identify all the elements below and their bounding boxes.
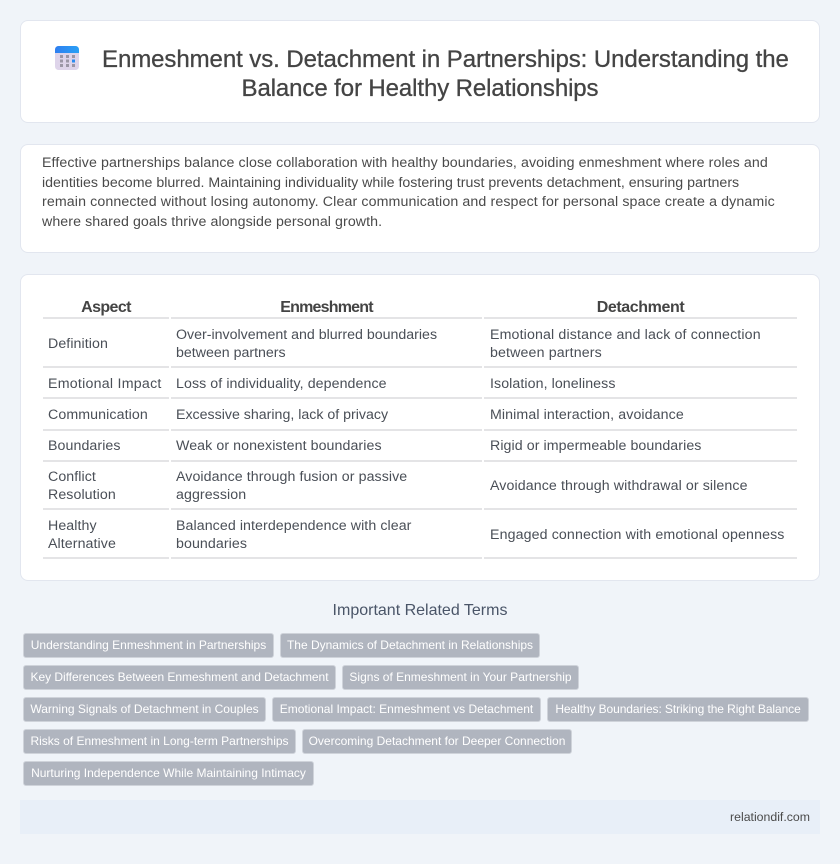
row: conflict resolution	[48, 469, 116, 503]
healthy alternative: detachment: Engaged connection with emotional openness	[490, 527, 785, 543]
row: healthy alternative: Alternative	[48, 536, 116, 552]
tag	[272, 697, 541, 722]
definition: enmeshment	[176, 327, 437, 361]
icon: calendar	[55, 46, 79, 70]
row: emotional impact: Emotional Impact	[48, 376, 162, 392]
footer	[20, 800, 820, 834]
row: conflict resolution: Conflict	[48, 469, 96, 485]
conflict resolution: detachment: Avoidance through withdrawal or silence	[490, 478, 748, 494]
tag: Understanding Enmeshment in Partnerships	[31, 638, 266, 652]
panel: header	[20, 20, 820, 123]
tag	[280, 633, 540, 658]
tag: Nurturing Independence While Maintaining Intimacy	[31, 766, 306, 780]
tag	[23, 761, 314, 786]
table header: enmeshment: Enmeshment	[280, 299, 373, 316]
footer text: relationdif.com	[730, 810, 810, 824]
emotional impact: enmeshment: Loss of individuality, dependence	[176, 376, 387, 392]
tags: related terms	[23, 633, 809, 786]
title	[102, 46, 789, 102]
tag: Healthy Boundaries: Striking the Right Balance	[555, 702, 801, 716]
tag: The Dynamics of Detachment in Relationships	[287, 638, 533, 652]
tag: Risks of Enmeshment in Long-term Partnerships	[30, 734, 289, 748]
text block: introduction: Effective partnerships balance close collaboration with healthy boundaries, avoiding enmeshment where roles and	[42, 155, 768, 171]
heading: important related terms: Important Related Terms	[333, 602, 507, 619]
tag: Key Differences Between Enmeshment and Detachment	[30, 670, 328, 684]
healthy alternative: enmeshment: Balanced interdependence with clear	[176, 518, 411, 534]
tag: Warning Signals of Detachment in Couples	[30, 702, 259, 716]
conflict resolution: enmeshment: Avoidance through fusion or passive	[176, 469, 407, 485]
tag: Overcoming Detachment for Deeper Connection	[309, 734, 565, 748]
healthy alternative: enmeshment: boundaries	[176, 536, 247, 552]
definition: detachment	[490, 327, 761, 361]
communication: detachment: Minimal interaction, avoidance	[490, 407, 684, 423]
title line 2: Balance for Healthy Relationships	[242, 75, 598, 102]
tag: Emotional Impact: Enmeshment vs Detachment	[280, 702, 533, 716]
boundaries: enmeshment: Weak or nonexistent boundaries	[176, 438, 382, 454]
table header: aspect: Aspect	[81, 299, 131, 316]
row: definition: Definition	[48, 336, 108, 352]
row: healthy alternative: Healthy	[48, 518, 97, 534]
conflict resolution: enmeshment	[176, 469, 407, 503]
definition: enmeshment: Over-involvement and blurred boundaries	[176, 327, 437, 343]
communication: enmeshment: Excessive sharing, lack of privacy	[176, 407, 388, 423]
text block: introduction: remain connected without losing autonomy. Clear communication and respect for personal space create a dynamic	[42, 194, 775, 210]
row: conflict resolution: Resolution	[48, 487, 116, 503]
tag	[302, 729, 572, 754]
title line 1: Enmeshment vs. Detachment in Partnerships: Understanding the	[102, 46, 789, 73]
tag: Signs of Enmeshment in Your Partnership	[349, 670, 572, 684]
text block: introduction: identities become blurred. Maintaining individuality while fostering trust prevents detachment, ensuring partners	[42, 175, 739, 191]
boundaries: detachment: Rigid or impermeable boundaries	[490, 438, 701, 454]
row: communication: Communication	[48, 407, 148, 423]
panel: comparison table	[20, 274, 820, 581]
table header: detachment: Detachment	[597, 299, 684, 316]
panel: introduction	[20, 144, 820, 253]
tag	[23, 633, 274, 658]
tag	[23, 665, 336, 690]
definition: enmeshment: between partners	[176, 345, 286, 361]
definition: detachment: between partners	[490, 345, 602, 361]
row: boundaries: Boundaries	[48, 438, 121, 454]
tag	[23, 697, 266, 722]
emotional impact: detachment: Isolation, loneliness	[490, 376, 616, 392]
healthy alternative: enmeshment	[176, 518, 412, 552]
text block: introduction: where shared goals thrive alongside personal growth.	[42, 214, 382, 230]
text block: introduction	[42, 155, 775, 230]
tag	[547, 697, 809, 722]
row: healthy alternative	[48, 518, 116, 552]
tag	[342, 665, 579, 690]
definition: detachment: Emotional distance and lack of connection	[490, 327, 761, 343]
conflict resolution: enmeshment: aggression	[176, 487, 246, 503]
tag	[23, 729, 296, 754]
